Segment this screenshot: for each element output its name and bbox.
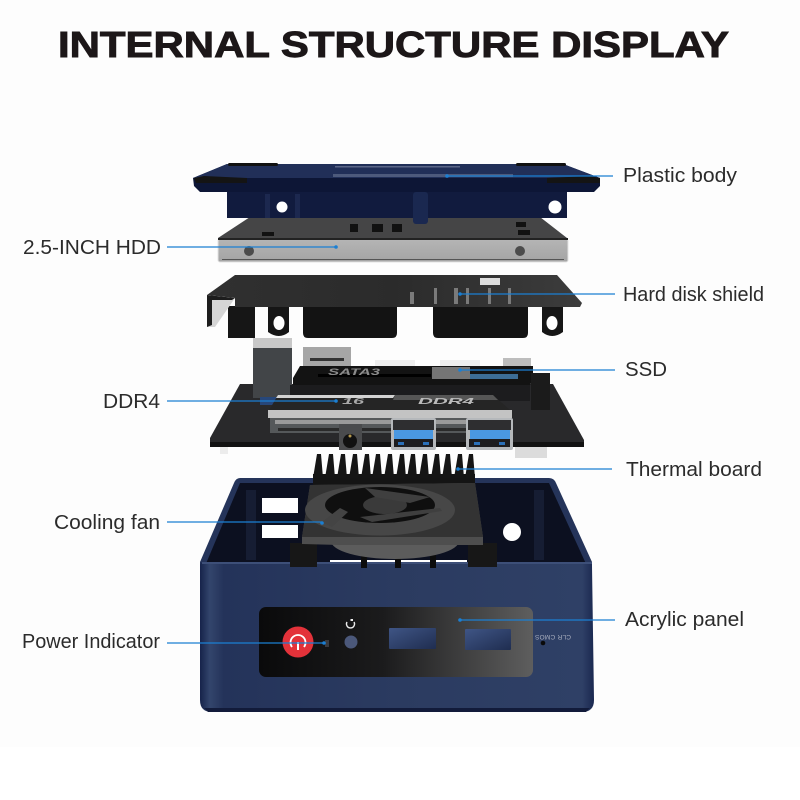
SSD: SATA3 [328,367,380,377]
ethernet port [253,338,351,398]
DDR4 memory: 16 [342,397,365,406]
label: Thermal board [456,459,762,481]
label: Acrylic panel [458,609,744,631]
DDR4 memory [260,395,512,433]
DDR4 memory: DDR4 [418,397,475,406]
label: 2.5-INCH HDD: 2.5-INCH HDD [23,237,161,259]
icon: red power button [282,626,314,658]
label: Cooling fan: Cooling fan [54,512,160,534]
label: Hard disk shield: Hard disk shield [623,284,764,306]
component: thermal board [313,454,475,490]
label: DDR4 [103,391,338,413]
label: Plastic body: Plastic body [623,165,737,187]
label: Power Indicator: Power Indicator [22,631,160,653]
label: Acrylic panel: Acrylic panel [625,609,744,631]
label: SSD [458,359,667,381]
USB window right [465,629,511,650]
CLR CMOS label and pinhole: CLR CMOS [534,633,571,640]
label: SSD: SSD [625,359,667,381]
USB port left [391,418,436,450]
component: motherboard with SSD and DDR4 [210,338,584,458]
USB port right [466,418,513,450]
label: 2.5-INCH HDD [23,237,338,259]
title: INTERNAL STRUCTURE DISPLAY [58,24,729,65]
component: 2.5-inch HDD [218,217,568,262]
audio jack with icon [344,619,358,648]
label: Cooling fan [54,512,324,534]
label: Power Indicator [22,631,326,653]
indicator light [325,640,329,647]
label: Hard disk shield [458,284,764,306]
DC jack [339,424,362,450]
label: DDR4: DDR4 [103,391,160,413]
component: cooling fan [290,483,497,568]
label: Plastic body [445,165,737,187]
USB window left [389,628,436,649]
CLR CMOS label and pinhole [534,633,571,645]
acrylic panel [259,607,533,677]
component: case interior and front [200,478,594,712]
SSD [293,366,533,385]
component: hard disk shield [207,275,582,338]
component: plastic body [193,163,600,224]
label: Thermal board: Thermal board [626,459,762,481]
